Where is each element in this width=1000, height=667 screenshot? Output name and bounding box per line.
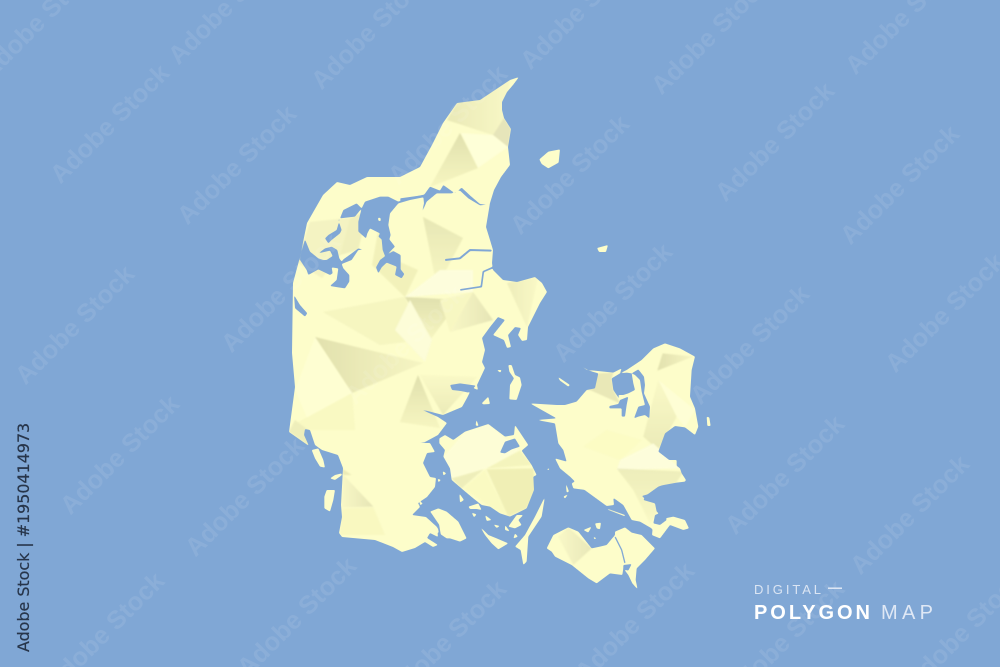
watermarks: Adobe Stock (548, 237, 679, 368)
facets: Funen (443, 424, 535, 517)
subtitle: DIGITAL: DIGITAL (754, 582, 821, 597)
heading: MAP: MAP (881, 602, 933, 624)
watermarks: Adobe Stock (835, 119, 966, 250)
watermarks: Adobe Stock (505, 109, 636, 240)
watermarks: Adobe Stock (55, 389, 186, 520)
watermarks: Adobe Stock (172, 99, 303, 230)
watermarks: Adobe Stock (720, 409, 851, 540)
watermarks: Adobe Stock (845, 449, 976, 580)
polygon map of Denmark (280, 70, 720, 600)
watermarks: Adobe Stock (685, 279, 816, 410)
dash (828, 588, 842, 589)
watermarks: Adobe Stock (710, 76, 841, 207)
facets: northern Jutland (297, 80, 538, 362)
facets: central and southern Jutland (289, 337, 477, 535)
watermarks: Adobe Stock (340, 279, 471, 410)
title block: Digital Polygon Map (754, 582, 933, 624)
watermarks: Adobe Stock (216, 227, 347, 358)
heading: POLYGON: POLYGON (754, 602, 870, 624)
stock id vertical text: Adobe Stock | #1950414973 (14, 423, 33, 652)
facets: Lolland (564, 528, 592, 564)
facets: Zealand (588, 353, 694, 509)
watermarks: Adobe Stock (10, 259, 141, 390)
watermarks: Adobe Stock (383, 59, 514, 190)
watermarks: Adobe Stock (45, 58, 176, 189)
watermarks: Adobe Stock (180, 431, 311, 562)
